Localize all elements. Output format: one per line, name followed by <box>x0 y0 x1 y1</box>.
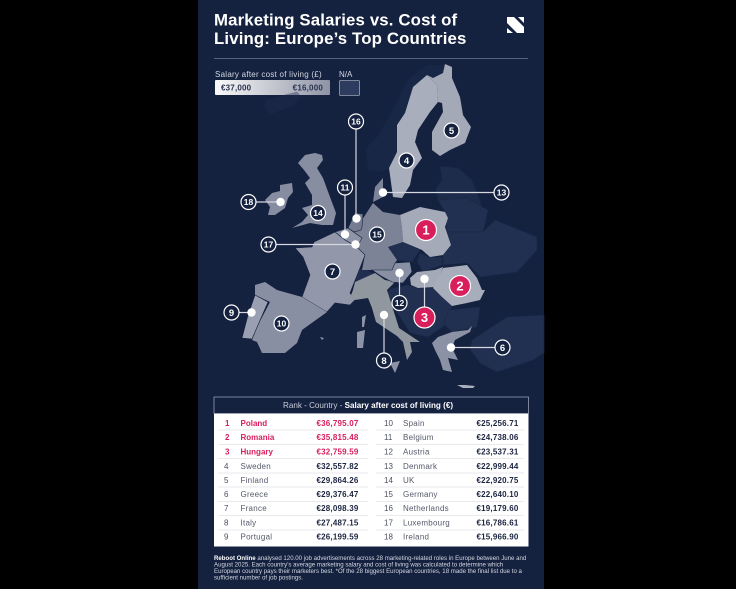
rows 4 to 9: 5 <box>224 476 229 485</box>
rows 10 to 18: €22,999.44 <box>476 462 519 471</box>
marker 1 Poland: 1 <box>422 222 430 238</box>
rows 4 to 9: Portugal <box>240 532 272 542</box>
rows 10 to 18: €23,537.31 <box>476 448 519 456</box>
marker 15 Germany <box>370 227 384 242</box>
footnote: August 2025. Each country’s average marketing salary and cost of living was calculated to determine which <box>214 562 503 568</box>
rows 4 to 9: €32,557.82 <box>316 462 359 471</box>
marker 9 Portugal <box>224 305 256 320</box>
top three rows <box>225 419 359 456</box>
rows 4 to 9: €26,199.59 <box>316 532 359 542</box>
rows 4 to 9: €27,487.15 <box>316 518 359 528</box>
rows 4 to 9: Greece <box>240 490 269 499</box>
marker 17 Luxembourg <box>261 237 360 252</box>
marker 5 Finland <box>444 123 459 138</box>
marker 7 France: 7 <box>330 267 335 278</box>
marker 14 UK <box>310 206 326 220</box>
legend: salary scale: Salary after cost of living (£) <box>215 70 322 79</box>
rows 10 to 18: Luxembourg <box>403 518 450 528</box>
rows 4 to 9: Italy <box>240 518 256 528</box>
rows 4 to 9: €28,098.39 <box>316 504 359 513</box>
rows 10 to 18: Belgium <box>403 433 434 442</box>
marker 9 Portugal: 9 <box>229 308 234 319</box>
title: Marketing Salaries vs. Cost of <box>214 10 457 30</box>
top three rows: 2 <box>225 433 230 442</box>
rows 10 to 18: €22,920.75 <box>476 476 519 485</box>
rows 10 to 18: €25,256.71 <box>476 419 519 428</box>
rows 4 to 9: 7 <box>224 504 229 513</box>
legend: salary scale: €16,000 <box>293 84 323 92</box>
legend: salary scale <box>215 70 330 95</box>
marker 8 Italy: 8 <box>381 356 387 367</box>
non-ranked countries <box>265 64 544 372</box>
marker 12 Austria <box>392 269 407 310</box>
country: Ireland <box>265 183 293 215</box>
marker 4 Sweden <box>399 153 414 168</box>
rows 10 to 18: 16 <box>384 504 393 513</box>
marker 12 Austria: 12 <box>395 298 404 308</box>
icon: logo <box>507 17 524 33</box>
country: Sweden <box>389 75 438 198</box>
marker 4 Sweden: 4 <box>404 156 410 167</box>
table <box>214 397 528 546</box>
rows 10 to 18: 15 <box>384 490 393 499</box>
country: Poland <box>400 207 451 257</box>
rows 10 to 18: Germany <box>403 490 438 499</box>
marker 6 Greece <box>447 340 510 355</box>
marker 11 Belgium <box>338 180 352 239</box>
rows 4 to 9: €29,864.26 <box>316 476 359 485</box>
marker 13 Denmark <box>379 185 509 200</box>
rows 10 to 18: 10 <box>384 419 393 428</box>
country: Finland <box>427 64 471 156</box>
legend: salary scale: €37,000 <box>221 84 252 92</box>
rows 10 to 18: Ireland <box>403 532 429 542</box>
rows 10 to 18: Spain <box>403 419 425 428</box>
table header: Rank - Country - Salary after cost of living (€) <box>283 401 453 410</box>
marker 16 Netherlands: 16 <box>351 116 361 126</box>
footnote: Reboot Online analysed 120.00 job advertisements across 28 marketing-related roles in Europe between June and <box>214 555 526 562</box>
marker 14 UK: 14 <box>313 208 323 218</box>
marker 7 France <box>325 264 340 279</box>
country: Netherlands <box>348 213 363 232</box>
rows 10 to 18: 13 <box>384 462 393 471</box>
rows 10 to 18: 11 <box>384 433 393 442</box>
top three rows: €32,759.59 <box>316 448 359 456</box>
table body <box>214 397 528 546</box>
map of Europe <box>242 64 544 388</box>
country: UK <box>292 153 336 228</box>
country: France <box>295 232 365 312</box>
rows 10 to 18: €22,640.10 <box>476 490 519 499</box>
marker 8 Italy <box>376 311 392 368</box>
marker 5 Finland: 5 <box>449 126 455 137</box>
rows 4 to 9: 4 <box>224 462 229 471</box>
rows 10 to 18: 14 <box>384 476 393 485</box>
rows 10 to 18: 12 <box>384 448 393 456</box>
rows 10 to 18: 17 <box>384 518 393 528</box>
marker 6 Greece: 6 <box>500 343 505 354</box>
footnote: European country pays their marketers best. *Of the 28 biggest European countries, 18 made the final list due to a <box>214 568 523 575</box>
marker 1 Poland <box>416 220 436 240</box>
top three rows: 1 <box>225 419 230 428</box>
title: Living: Europe’s Top Countries <box>214 29 466 48</box>
country: Greece <box>432 326 472 372</box>
top three rows: Romania <box>240 433 275 442</box>
legend: N/A: N/A <box>339 70 353 79</box>
rows 10 to 18 <box>384 419 519 542</box>
marker 3 Hungary <box>414 275 435 328</box>
rows 4 to 9: Finland <box>240 476 268 485</box>
marker 3 Hungary: 3 <box>421 310 428 325</box>
country: Austria <box>372 262 412 283</box>
legend: N/A <box>339 70 360 96</box>
marker 18 Ireland <box>241 194 285 210</box>
marker 13 Denmark: 13 <box>497 188 506 198</box>
rows 10 to 18: Austria <box>403 448 430 456</box>
rows 10 to 18: 18 <box>384 532 393 542</box>
country: Denmark <box>373 178 383 202</box>
marker 18 Ireland: 18 <box>244 197 253 207</box>
rows 4 to 9: 9 <box>224 532 229 542</box>
rows 4 to 9: €29,376.47 <box>316 490 359 499</box>
marker 10 Spain <box>274 316 289 331</box>
rows 4 to 9 <box>224 462 359 542</box>
Italian islands <box>320 315 400 373</box>
country: Germany <box>350 203 403 270</box>
country: Hungary <box>410 267 443 288</box>
top three rows: Hungary <box>240 448 274 456</box>
country: Romania <box>433 265 485 306</box>
table header <box>214 397 528 414</box>
marker 16 Netherlands <box>348 114 364 223</box>
background panel <box>198 0 544 589</box>
rows 10 to 18: Netherlands <box>403 504 449 513</box>
rows 4 to 9: 6 <box>224 490 229 499</box>
country: Belgium <box>335 228 362 247</box>
rows 4 to 9: Sweden <box>240 462 271 471</box>
marker 10 Spain: 10 <box>277 318 286 328</box>
marker 17 Luxembourg: 17 <box>264 240 273 250</box>
rows 10 to 18: Denmark <box>403 462 438 471</box>
marker 2 Romania <box>450 276 470 296</box>
rows 10 to 18: €16,786.61 <box>476 518 519 528</box>
top three rows: 3 <box>225 448 230 456</box>
marker 2 Romania: 2 <box>456 278 464 294</box>
rows 10 to 18: UK <box>403 476 415 485</box>
rows 4 to 9: France <box>240 504 267 513</box>
country: Portugal <box>242 295 268 339</box>
top three rows: Poland <box>240 419 267 428</box>
country: Italy <box>350 273 420 360</box>
country: Spain <box>252 282 327 353</box>
marker 11 Belgium: 11 <box>340 182 350 192</box>
rows 10 to 18: €19,179.60 <box>476 504 519 513</box>
rows 4 to 9: 8 <box>224 518 229 528</box>
top three rows: €36,795.07 <box>316 419 359 428</box>
marker 15 Germany: 15 <box>372 230 382 240</box>
rows 10 to 18: €24,738.06 <box>476 433 519 442</box>
rows 10 to 18: €15,966.90 <box>476 532 519 542</box>
top three rows: €35,815.48 <box>316 433 359 442</box>
footnote: sufficient number of job postings. <box>214 574 303 582</box>
